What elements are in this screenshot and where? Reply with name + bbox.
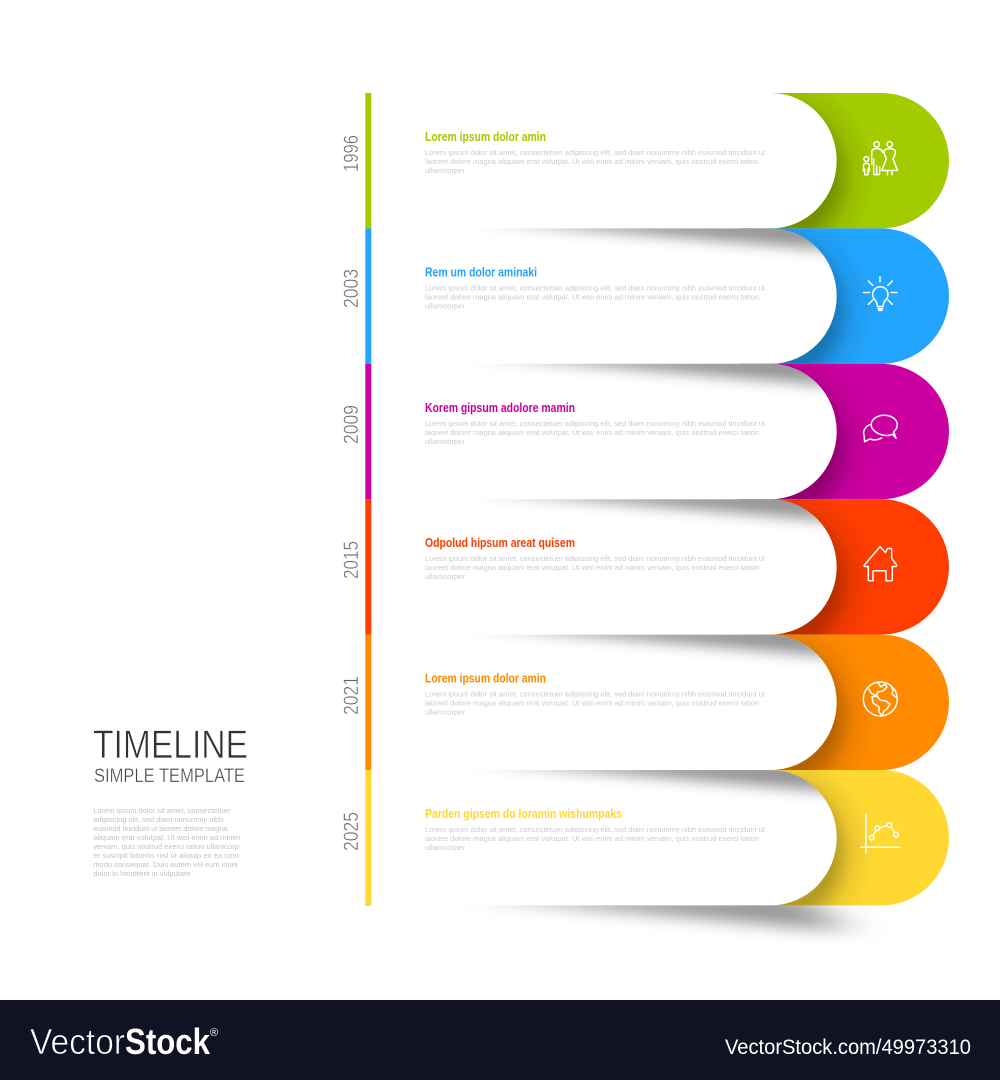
body text 1: Lorem ipsum dolor sit amet, consectetuer adipiscing elit, sed diam nonummy nibh euismod tincidunt ut bbox=[425, 150, 765, 157]
panel: 2025 bbox=[344, 770, 949, 906]
body text 6: laoreet dolore magna aliquam erat volutpat. Ut wisi enim ad minim veniam, quis nostrud exerci tation bbox=[425, 836, 759, 843]
icon: globe bbox=[863, 682, 897, 716]
body text 6: ullamcorper bbox=[425, 845, 466, 852]
footer bar bbox=[0, 1000, 1000, 1080]
subtitle: SIMPLE TEMPLATE bbox=[94, 766, 245, 787]
title: TIMELINE bbox=[93, 723, 248, 767]
panel: 2003 bbox=[344, 228, 949, 364]
bottom card shadow bbox=[470, 896, 850, 932]
year 2015: 2015 bbox=[340, 541, 363, 579]
year 2025: 2025 bbox=[340, 812, 363, 851]
body text 1: ullamcorper bbox=[425, 168, 466, 175]
year 2021: 2021 bbox=[340, 676, 363, 715]
body text 3: ullamcorper bbox=[425, 439, 466, 446]
body text 4: laoreet dolore magna aliquam erat volutpat. Ut wisi enim ad minim veniam, quis nostrud exerci tation bbox=[425, 565, 759, 572]
body text 5: ullamcorper bbox=[425, 710, 466, 717]
intro text block: er suscipit lobortis nisl ut aliquip ex ea com- bbox=[93, 853, 242, 860]
icon: speech bubbles bbox=[864, 415, 897, 442]
intro text block: aliquam erat volutpat. Ut wisi enim ad minim bbox=[93, 835, 240, 842]
intro text block: euismod tincidunt ut laoreet dolore magna bbox=[93, 826, 227, 833]
heading 6: Parden gipsem do loramin wishumpaks bbox=[425, 806, 622, 821]
year 2003: 2003 bbox=[340, 269, 363, 308]
heading 1: Lorem ipsum dolor amin bbox=[425, 129, 546, 144]
body text 5: laoreet dolore magna aliquam erat volutpat. Ut wisi enim ad minim veniam, quis nostrud exerci tation bbox=[425, 701, 759, 708]
body text 5: Lorem ipsum dolor sit amet, consectetuer adipiscing elit, sed diam nonummy nibh euismod tincidunt ut bbox=[425, 692, 765, 699]
heading: timeline title block bbox=[93, 723, 248, 787]
intro text block bbox=[93, 808, 242, 878]
body text 3 bbox=[425, 421, 765, 446]
intro text block: modo consequat. Duis autem vel eum iriure bbox=[93, 862, 238, 869]
panel: 2015 bbox=[344, 499, 949, 635]
body text 2: ullamcorper bbox=[425, 303, 466, 310]
body text 3: laoreet dolore magna aliquam erat volutpat. Ut wisi enim ad minim veniam, quis nostrud exerci tation bbox=[425, 430, 759, 437]
body text 1 bbox=[425, 150, 765, 175]
panel: 2021 bbox=[344, 634, 949, 770]
intro text block: Lorem ipsum dolor sit amet, consectetuer bbox=[93, 808, 231, 815]
year 2009: 2009 bbox=[340, 405, 363, 444]
body text 6: Lorem ipsum dolor sit amet, consectetuer adipiscing elit, sed diam nonummy nibh euismod tincidunt ut bbox=[425, 827, 765, 834]
body text 2: Lorem ipsum dolor sit amet, consectetuer adipiscing elit, sed diam nonummy nibh euismod tincidunt ut bbox=[425, 285, 765, 292]
body text 4: Lorem ipsum dolor sit amet, consectetuer adipiscing elit, sed diam nonummy nibh euismod tincidunt ut bbox=[425, 556, 765, 563]
body text 3: Lorem ipsum dolor sit amet, consectetuer adipiscing elit, sed diam nonummy nibh euismod tincidunt ut bbox=[425, 421, 765, 428]
heading 3: Korem gipsum adolore mamin bbox=[425, 400, 575, 415]
intro text block: dolor in hendrerit in vulputate bbox=[93, 871, 190, 878]
icon: family bbox=[864, 142, 898, 175]
icon: line chart bbox=[861, 814, 900, 853]
footer image id: VectorStock.com/49973310 bbox=[725, 1036, 971, 1059]
panel: 1996 bbox=[344, 93, 949, 228]
icon: light bulb bbox=[864, 277, 897, 310]
body text 1: laoreet dolore magna aliquam erat volutpat. Ut wisi enim ad minim veniam, quis nostrud exerci tation bbox=[425, 159, 759, 166]
heading 5: Lorem ipsum dolor amin bbox=[425, 671, 546, 686]
body text 5 bbox=[425, 692, 765, 717]
panel: 2009 bbox=[344, 364, 949, 500]
icon: house bbox=[864, 547, 897, 581]
footer logo: VectorStock bbox=[30, 1021, 223, 1062]
heading 4: Odpolud hipsum areat quisem bbox=[425, 535, 575, 550]
intro text block: adipiscing elit, sed diam nonummy nibh bbox=[93, 817, 223, 824]
body text 2 bbox=[425, 285, 765, 310]
heading 2: Rem um dolor aminaki bbox=[425, 264, 537, 279]
year 1996: 1996 bbox=[340, 135, 363, 172]
intro text block: veniam, quis nostrud exerci tation ullamcorp- bbox=[93, 844, 242, 851]
body text 6 bbox=[425, 827, 765, 852]
footer logo: ® bbox=[210, 1027, 218, 1039]
body text 4: ullamcorper bbox=[425, 574, 466, 581]
body text 2: laoreet dolore magna aliquam erat volutpat. Ut wisi enim ad minim veniam, quis nostrud exerci tation bbox=[425, 294, 759, 301]
body text 4 bbox=[425, 556, 765, 581]
